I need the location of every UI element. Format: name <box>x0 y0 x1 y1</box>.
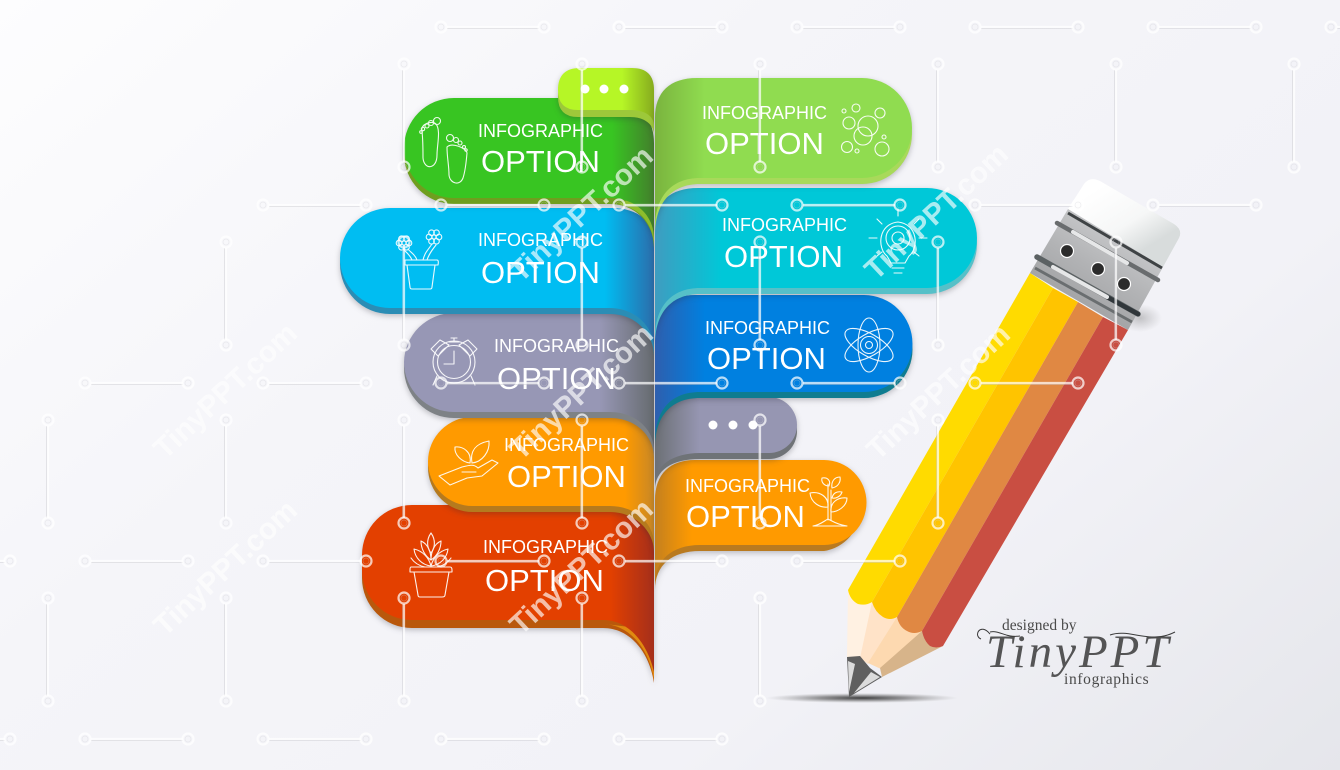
label: grey option <box>494 336 619 396</box>
right band: blue <box>655 295 912 448</box>
watermark: TinyPPT.com <box>503 140 660 289</box>
watermark: TinyPPT.com <box>147 317 304 466</box>
label: orange option right <box>685 476 810 534</box>
icon: succulent <box>410 533 452 597</box>
right band: cyan <box>655 188 977 345</box>
icon: alarm clock <box>431 338 477 385</box>
label: orange option right: OPTION <box>686 499 805 534</box>
label: red option: INFOGRAPHIC <box>483 537 608 557</box>
pencil <box>766 179 1180 703</box>
label: red option: OPTION <box>485 563 604 598</box>
watermark: TinyPPT.com <box>860 318 1017 467</box>
label: orange option left: INFOGRAPHIC <box>504 435 629 455</box>
label: cyan option <box>722 215 847 274</box>
left band: grey <box>404 313 654 458</box>
right band: light green <box>655 78 912 236</box>
left tab: lime dots <box>558 68 654 135</box>
label: light green option <box>702 103 827 161</box>
label: red option <box>483 537 608 598</box>
watermark <box>147 138 1017 643</box>
label: blue option right <box>705 318 830 376</box>
left band: red <box>362 505 654 683</box>
logo: designed by TinyPPT infographics: TinyPPT <box>986 626 1172 678</box>
icon: atom <box>840 318 898 372</box>
label: green option <box>478 121 603 179</box>
left band: orange <box>428 417 654 552</box>
icon: bubbles <box>842 104 889 156</box>
label: orange option left: OPTION <box>507 459 626 494</box>
label: blue option right: OPTION <box>707 341 826 376</box>
watermark: TinyPPT.com <box>503 318 660 467</box>
label: light green option: OPTION <box>705 126 824 161</box>
pencil ferrule <box>1030 209 1163 330</box>
pencil wood cone <box>847 590 943 677</box>
label: blue option: OPTION <box>481 255 600 290</box>
label: orange option right: INFOGRAPHIC <box>685 476 810 496</box>
label: blue option: INFOGRAPHIC <box>478 230 603 250</box>
icon: light bulb <box>869 209 927 273</box>
right band: orange <box>655 460 866 590</box>
icon: sprout <box>810 477 847 526</box>
logo: designed by TinyPPT infographics <box>978 617 1175 688</box>
icon: flower pot <box>396 230 442 289</box>
watermark: TinyPPT.com <box>858 138 1015 287</box>
label: blue option <box>478 230 603 290</box>
pencil body stripes <box>848 273 1128 648</box>
left band: blue <box>340 208 654 356</box>
label: cyan option: OPTION <box>724 239 843 274</box>
label: grey option: INFOGRAPHIC <box>494 336 619 356</box>
label: green option: OPTION <box>481 144 600 179</box>
icon: footprints <box>420 118 467 183</box>
logo: designed by TinyPPT infographics: infographics <box>1064 671 1149 688</box>
label: cyan option: INFOGRAPHIC <box>722 215 847 235</box>
left band: green <box>404 98 654 248</box>
label: green option: INFOGRAPHIC <box>478 121 603 141</box>
icon: hand holding plant <box>439 441 498 485</box>
watermark: TinyPPT.com <box>503 493 660 642</box>
logo: designed by TinyPPT infographics: designed by <box>1002 617 1077 634</box>
label: light green option: INFOGRAPHIC <box>702 103 827 123</box>
pencil eraser <box>1068 179 1180 267</box>
label: grey option: OPTION <box>497 361 616 396</box>
label: orange option left <box>504 435 629 494</box>
right tab: grey dots <box>655 397 797 490</box>
watermark: TinyPPT.com <box>147 494 304 643</box>
pencil metal tip <box>847 656 882 697</box>
pencil ground shadow <box>766 693 958 703</box>
label: blue option right: INFOGRAPHIC <box>705 318 830 338</box>
